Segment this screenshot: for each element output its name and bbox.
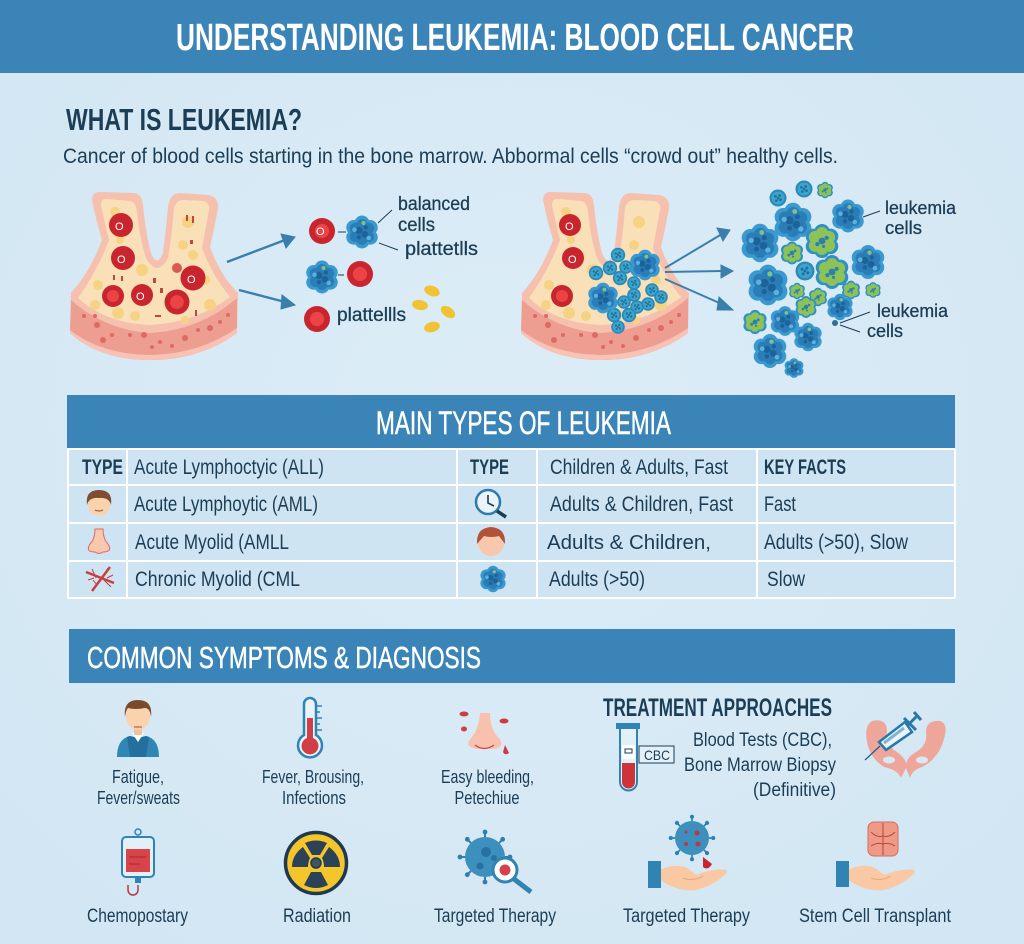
- table text: Slow: [767, 568, 806, 591]
- diagram: leukemia marrow: [521, 180, 957, 378]
- healthy cells: O: [316, 226, 325, 238]
- table text: Chronic Myolid (CML: [135, 568, 300, 591]
- bone marrow cross-section healthy: O: [115, 221, 124, 233]
- bone marrow cross-section leukemic: O: [565, 221, 574, 233]
- bone marrow cross-section leukemic: [521, 192, 689, 360]
- labels: [867, 198, 957, 341]
- icon: clock magnifier: [476, 490, 506, 517]
- treatment: targeted therapy 2: Targeted Therapy: [623, 906, 750, 927]
- table text: Adults (>50): [549, 568, 645, 591]
- symptom: fatigue: Fatigue,: [112, 767, 164, 787]
- table text: TYPE: [82, 456, 123, 479]
- table heading: [67, 395, 955, 449]
- icon: nose small: [88, 529, 110, 554]
- symptom: fatigue: Fever/sweats: [97, 788, 180, 808]
- arrow up: [227, 234, 295, 262]
- labels: leukemia: [877, 301, 949, 321]
- diagnosis: blood test tube: [616, 723, 674, 790]
- arrow down: [239, 290, 295, 309]
- bone marrow cross-section healthy: O: [136, 291, 145, 303]
- icon: virus over hand: [648, 815, 727, 890]
- labels: [337, 194, 478, 326]
- treatment: chemo: Chemopostary: [87, 906, 188, 927]
- section banner: symptoms: COMMON SYMPTOMS & DIAGNOSIS: [87, 640, 481, 675]
- treatment: targeted therapy 1: [434, 830, 556, 927]
- labels: cells: [398, 215, 435, 236]
- icon: person: [117, 700, 159, 757]
- table text: TYPE: [470, 456, 509, 479]
- symptom: bleeding: Petechiue: [454, 788, 520, 808]
- labels: plattetlls: [405, 239, 478, 260]
- table text: Adults & Children, Fast: [550, 493, 733, 516]
- table text: Children & Adults, Fast: [550, 456, 728, 479]
- treatment heading: TREATMENT APPROACHES: [603, 694, 832, 722]
- labels: cells: [867, 321, 903, 341]
- icon: radiation: [286, 832, 346, 894]
- panel: main types table: [67, 395, 955, 598]
- table text: Acute Lymphoctyic (ALL): [134, 456, 324, 479]
- table text: Adults & Children,: [547, 532, 711, 554]
- symptom: fever: [262, 698, 364, 808]
- icon: pelvis with syringe: [865, 712, 946, 778]
- diagnosis text: Blood Tests (CBC),: [693, 730, 832, 751]
- icon: head: [477, 527, 505, 556]
- symptom: fever: Fever, Brousing,: [262, 767, 364, 787]
- icon: marrow over hand: [836, 822, 915, 890]
- table text: Acute Lymphoytic (AML): [134, 493, 318, 516]
- table text: Adults (>50), Slow: [764, 531, 909, 554]
- symptom: bleeding: Easy bleeding,: [441, 767, 534, 787]
- icon: nose with drops: [460, 712, 509, 754]
- treatment: targeted therapy 2: [623, 815, 750, 927]
- bone marrow cross-section leukemic: O: [568, 254, 577, 266]
- treatment: radiation: [283, 832, 351, 927]
- healthy cells: [304, 210, 457, 334]
- diagram: healthy marrow: [70, 192, 478, 360]
- diagnosis text: Bone Marrow Biopsy: [684, 755, 836, 776]
- diagnosis text: (Definitive): [753, 780, 836, 801]
- treatment: stem cell transplant: [799, 822, 952, 927]
- table text: KEY FACTS: [764, 456, 846, 479]
- icon: blue cell small: [480, 566, 506, 592]
- icon: virus with magnifier: [458, 830, 531, 892]
- treatment: chemo: [87, 829, 188, 927]
- treatment: targeted therapy 1: Targeted Therapy: [434, 906, 556, 927]
- title banner: [0, 0, 1024, 73]
- icon: IV bag: [122, 829, 154, 895]
- bone marrow cross-section healthy: [70, 192, 238, 360]
- symptom: bleeding: [441, 712, 534, 808]
- bone marrow cross-section healthy: O: [187, 274, 196, 286]
- section heading: what is leukemia: WHAT IS LEUKEMIA?: [66, 102, 302, 137]
- treatment: stem cell transplant: Stem Cell Transplant: [799, 906, 952, 927]
- labels: plattellls: [337, 305, 406, 326]
- section banner: symptoms: [69, 629, 955, 683]
- treatment: radiation: Radiation: [283, 906, 351, 927]
- icon: crossed vessels: [86, 567, 114, 591]
- table text: Fast: [764, 493, 796, 516]
- bone marrow cross-section healthy: O: [117, 254, 126, 266]
- labels: balanced: [398, 194, 470, 215]
- icon: face: [87, 490, 111, 516]
- arrows fan: [665, 228, 733, 310]
- labels: cells: [885, 218, 922, 238]
- labels: leukemia: [885, 198, 957, 218]
- table text: [82, 456, 909, 591]
- diagnosis: blood test tube: CBC: [644, 747, 670, 763]
- symptom: fever: Infections: [282, 788, 346, 808]
- table heading: MAIN TYPES OF LEUKEMIA: [376, 405, 671, 441]
- leukemia cell cloud: [742, 180, 884, 378]
- symptom: fatigue: [97, 700, 180, 808]
- diagnosis text: [684, 730, 836, 801]
- icon: thermometer: [298, 698, 322, 757]
- table text: Acute Myolid (AMLL: [135, 531, 289, 554]
- description text: Cancer of blood cells starting in the bone marrow. Abbormal cells “crowd out” healthy cells.: [63, 145, 838, 168]
